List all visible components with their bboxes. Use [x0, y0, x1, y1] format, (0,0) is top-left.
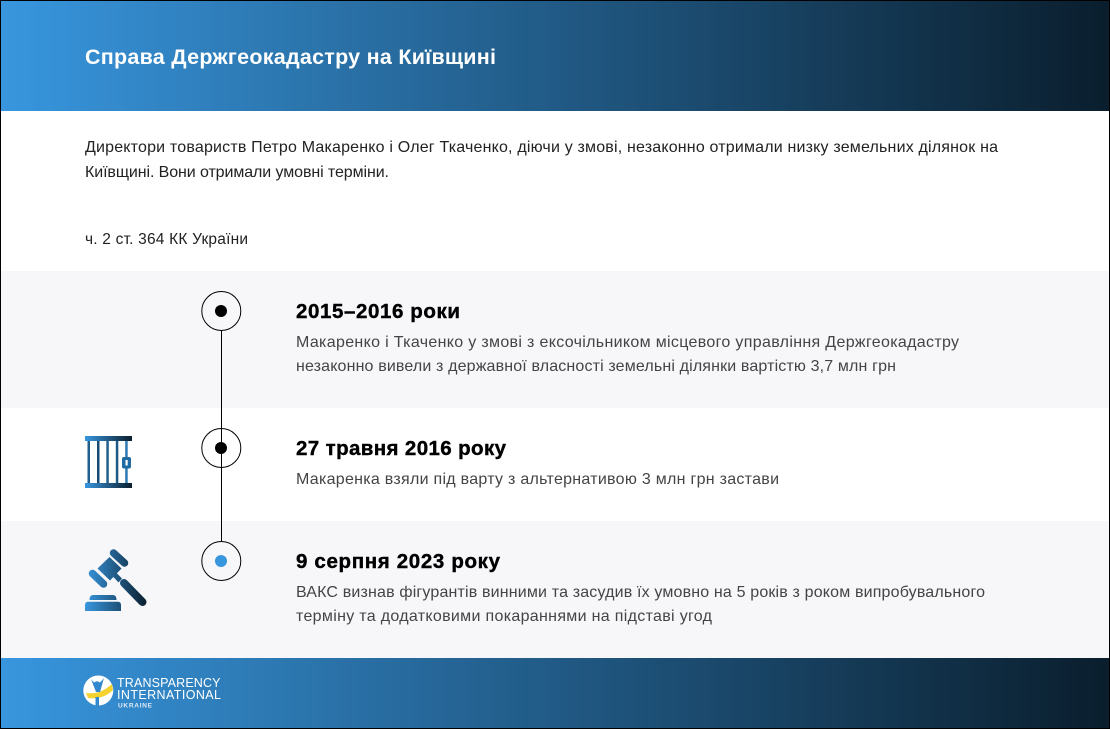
event: 2015–2016: 2015–2016 роки	[296, 300, 460, 323]
event: 9 August 2023	[296, 550, 985, 625]
title: Справа Держгеокадастру на Київщині	[85, 45, 496, 69]
panel: header band	[1, 1, 1109, 111]
event: 27 May 2016	[296, 437, 779, 488]
timeline marker: 9 August 2023	[202, 542, 241, 580]
event: 9 August 2023: терміну та додатковими покараннями на підставі угод	[296, 608, 713, 625]
event: 9 August 2023: ВАКС визнав фігурантів винними та засудив їх умовно на 5 років з роком випробувального	[296, 584, 985, 601]
logo: Transparency International Ukraine: INTERNATIONAL	[117, 688, 221, 702]
icon: gavel	[85, 553, 142, 611]
event: 2015–2016: Макаренко і Ткаченко у змові з ексочільником місцевого управління Держгеокадастру	[296, 334, 959, 351]
text block: case summary	[85, 139, 998, 181]
event: 27 May 2016: 27 травня 2016 року	[296, 437, 507, 460]
panel: row 2023 background	[1, 521, 1109, 658]
event: 2015–2016	[296, 300, 959, 375]
event: 9 August 2023: 9 серпня 2023 року	[296, 550, 501, 573]
logo: Transparency International Ukraine: UKRAINE	[118, 702, 153, 710]
text block: case summary: Директори товариств Петро Макаренко і Олег Ткаченко, діючи у змові, незаконно отримали низку земельних ділянок на	[85, 139, 998, 156]
icon: prison bars	[85, 436, 132, 488]
logo: Transparency International Ukraine: TRANSPARENCY	[117, 676, 221, 690]
panel: row 2015–2016 background	[1, 271, 1109, 408]
text block: legal article: ч. 2 ст. 364 КК України	[85, 231, 248, 248]
panel: footer band	[1, 658, 1109, 728]
logo: Transparency International Ukraine	[83, 676, 221, 710]
timeline	[202, 292, 241, 580]
text block: case summary: Київщині. Вони отримали умовні терміни.	[85, 164, 389, 181]
event: 27 May 2016: Макаренка взяли під варту з альтернативою 3 млн грн застави	[296, 471, 779, 488]
timeline marker: 2015–2016	[202, 292, 241, 330]
timeline marker: 27 May 2016	[202, 428, 241, 468]
event: 2015–2016: незаконно вивели з державної власності земельні ділянки вартістю 3,7 млн грн	[296, 358, 896, 375]
